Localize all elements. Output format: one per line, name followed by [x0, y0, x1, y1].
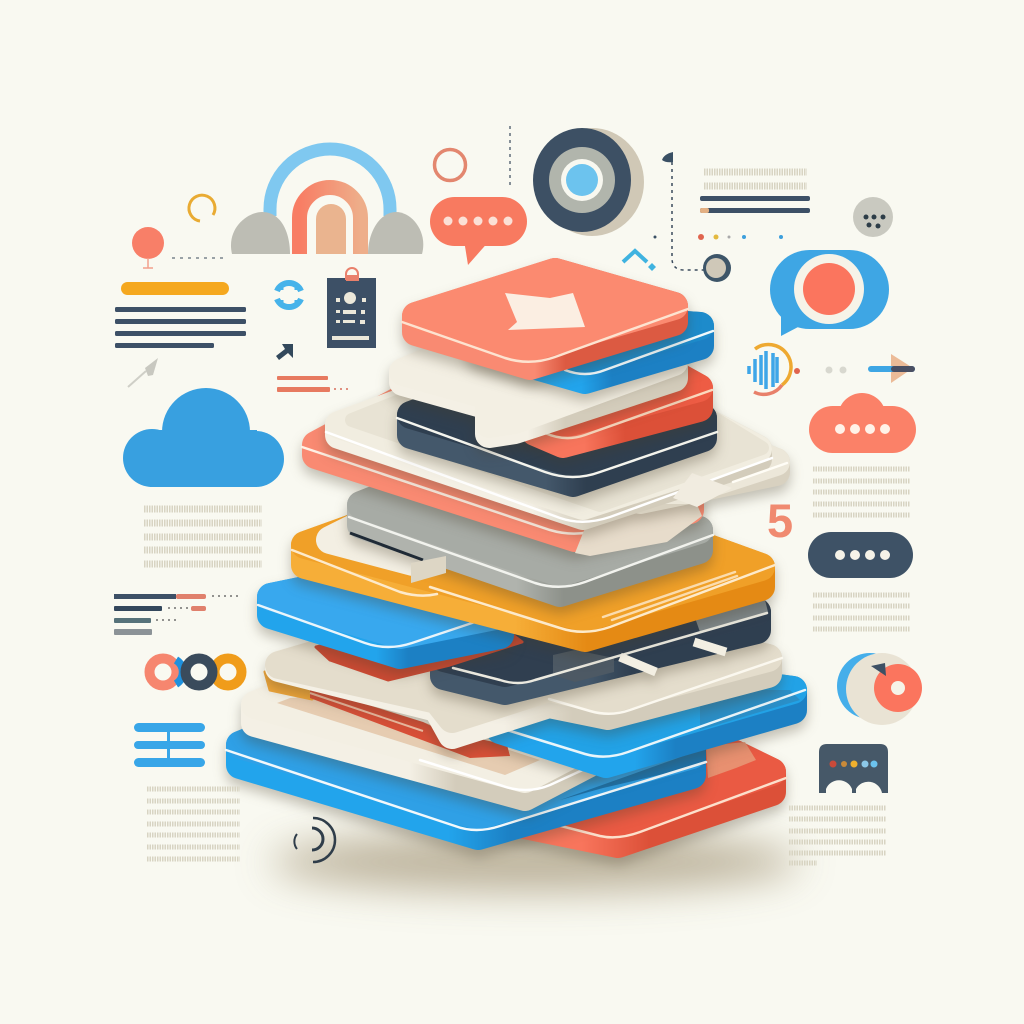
curled cream sheet: [575, 490, 702, 556]
plate: upper blue: [258, 589, 500, 655]
icon: clipboard: [327, 268, 376, 348]
text block: right lower: [813, 595, 910, 629]
plate: orange: [292, 474, 775, 638]
text block: upper left: [115, 282, 246, 348]
text block: under cloud: [144, 509, 262, 564]
plate: bottom coral: [500, 742, 786, 844]
icon: small orange ring: [189, 195, 215, 221]
text block: lower right: [789, 808, 886, 863]
plate: small cream tab: [330, 525, 435, 562]
plate: dark: [397, 360, 717, 483]
icon: layered circles: [837, 653, 922, 725]
icon: three rings: [150, 658, 242, 686]
text block: right middle: [813, 469, 910, 515]
plate: top coral: [402, 272, 688, 366]
central stack of plates: [226, 272, 805, 844]
plate: upper coral strip: [535, 372, 712, 444]
icon: map pin with leader: [132, 227, 226, 268]
icon: blue speech bubble: [770, 250, 889, 336]
dotted accents: [654, 234, 783, 240]
icon: target disc: [533, 128, 644, 236]
plate: upper blue strip: [480, 325, 713, 380]
icon: coral speech bubble: [430, 197, 527, 265]
plate: bottom blue: [226, 680, 706, 836]
icon: blue bars: [134, 723, 205, 767]
stack shadow: [270, 832, 800, 892]
icon: small dark arrow: [276, 344, 293, 360]
icon: blue cloud: [123, 388, 284, 487]
icon: teal chevron: [623, 251, 656, 271]
plate: lower cream: [255, 670, 600, 797]
icon: blue ring link: [277, 283, 301, 307]
number five: 5: [767, 494, 793, 547]
plate: dark with tabs: [444, 600, 768, 691]
dashed connector with ring: [662, 152, 731, 282]
plate: coral wide: [302, 400, 690, 538]
plate: mid cream: [279, 600, 782, 735]
icon: dark pill bubble: [808, 532, 913, 578]
plate: gray: [349, 470, 713, 593]
icon: white arrow on top plate: [505, 293, 585, 330]
plate: red sheet under blue: [316, 610, 522, 680]
legend lines: [114, 594, 238, 635]
dotted accents and arrow: [794, 354, 915, 383]
cream tab slit and step: [350, 533, 446, 583]
text block: lower left: [147, 789, 240, 859]
text block: coral lines: [277, 376, 350, 392]
fold arrow tab: [673, 473, 732, 507]
icon: bridge block: [819, 744, 888, 793]
icon: small coral ring: [434, 150, 466, 180]
plate: orange and red inner sheets: [265, 672, 510, 758]
icon: grey dot circle: [853, 197, 893, 237]
plate: upper cream: [403, 310, 674, 434]
tabs on dark plate: [620, 642, 726, 672]
icon: sound wave: [749, 344, 791, 394]
icon: pen: [128, 358, 158, 387]
text block: upper right: [700, 172, 810, 213]
plate: wide cream with folded corner: [326, 345, 787, 522]
icon: rainbow arch and clouds: [231, 149, 423, 254]
plate: mid right blue: [500, 670, 805, 764]
icon: dark partial circle: [294, 818, 335, 862]
icon: coral cloud bubble: [809, 393, 916, 453]
dashed connector: [509, 126, 511, 186]
